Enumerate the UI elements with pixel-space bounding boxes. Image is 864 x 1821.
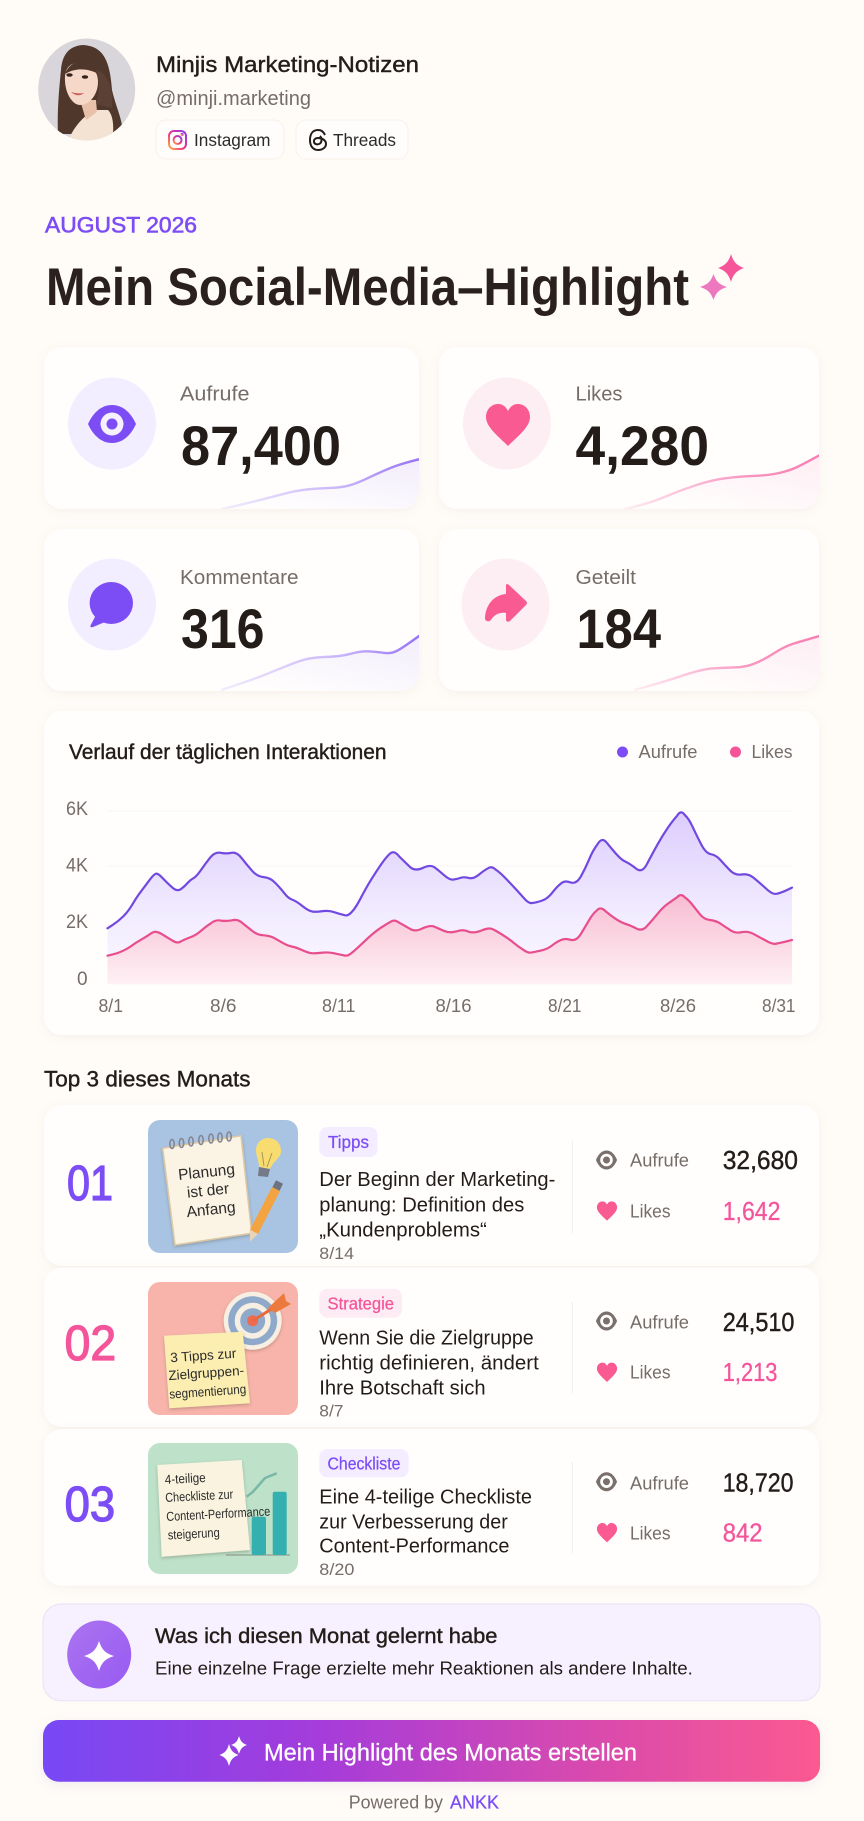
tag: Checkliste — [328, 1453, 400, 1473]
stats — [596, 1468, 794, 1548]
footer credit — [349, 1792, 499, 1812]
instagram pill — [156, 120, 284, 159]
post title — [319, 1486, 532, 1558]
panel: stat Geteilt: 184 — [576, 597, 661, 660]
instagram pill: Instagram — [194, 130, 270, 150]
button: create highlight — [43, 1720, 820, 1782]
panel: stat Likes — [448, 378, 819, 510]
stats: Aufrufe — [630, 1473, 689, 1493]
footer credit: Powered by — [349, 1792, 443, 1812]
panel: stat Kommentare: 316 — [181, 597, 264, 660]
icon: eye — [68, 378, 156, 470]
panel: stat Kommentare: Kommentare — [180, 567, 298, 589]
icon: threads — [310, 130, 326, 150]
panel: stat Aufrufe: Aufrufe — [180, 384, 250, 406]
thumbnail: checklist: Content-Performance — [166, 1504, 271, 1524]
section heading: Top 3 dieses Monats — [44, 1066, 251, 1092]
x axis labels: 8/1 — [98, 996, 123, 1016]
post title: zur Verbesserung der — [319, 1511, 508, 1533]
stats — [596, 1145, 798, 1226]
panel: top post 2 — [44, 1268, 819, 1427]
x axis labels: 8/26 — [660, 996, 696, 1016]
legend: Likes — [752, 742, 792, 762]
panel: stat Aufrufe — [52, 378, 419, 510]
panel: stat Aufrufe: 87,400 — [181, 414, 341, 477]
avatar portrait — [36, 36, 138, 144]
chart title: Verlauf der täglichen Interaktionen — [69, 741, 386, 764]
panel: monthly insight — [43, 1604, 820, 1701]
post title: „Kundenproblems“ — [319, 1220, 487, 1242]
threads pill: Threads — [333, 130, 396, 150]
post title: Ihre Botschaft sich — [319, 1377, 486, 1399]
stats: Likes — [630, 1523, 670, 1543]
profile header — [36, 36, 419, 159]
y axis labels: 6K — [66, 799, 88, 820]
handle: @minji.marketing — [156, 88, 311, 110]
post title — [319, 1327, 539, 1399]
stats: Likes — [630, 1202, 670, 1222]
account name: Minjis Marketing-Notizen — [156, 52, 419, 77]
rank 03: 03 — [65, 1478, 115, 1532]
stats: 842 — [723, 1518, 762, 1548]
stats: 24,510 — [723, 1307, 794, 1337]
icon: title sparkles — [700, 254, 744, 300]
tag — [319, 1127, 378, 1157]
area chart — [107, 812, 792, 984]
post title: Wenn Sie die Zielgruppe — [319, 1327, 534, 1349]
tag — [319, 1289, 402, 1318]
y axis labels — [66, 799, 792, 990]
x axis labels: 8/16 — [436, 996, 472, 1016]
panel: top post 3 — [44, 1429, 819, 1586]
panel: stat Likes: 4,280 — [576, 414, 709, 477]
insight heading: Was ich diesen Monat gelernt habe — [155, 1625, 498, 1648]
x axis labels: 8/31 — [762, 996, 796, 1016]
y axis labels: 2K — [66, 912, 88, 933]
x axis labels: 8/21 — [548, 996, 582, 1016]
title: Mein Social-Media–Highlight — [46, 258, 689, 317]
stats: Aufrufe — [630, 1150, 689, 1170]
stats: 1,213 — [723, 1357, 778, 1387]
insight text: Eine einzelne Frage erzielte mehr Reaktionen als andere Inhalte. — [155, 1658, 693, 1678]
thumbnail: checklist: 4-teilige — [164, 1470, 206, 1487]
stats: 32,680 — [723, 1145, 798, 1175]
thumbnail: notepad: ist der — [186, 1180, 230, 1202]
post title: Der Beginn der Marketing- — [319, 1169, 555, 1191]
footer credit: ANKK — [450, 1792, 499, 1812]
x axis labels: 8/11 — [322, 996, 356, 1016]
button: create highlight: Mein Highlight des Monats erstellen — [264, 1740, 637, 1767]
thumbnail: checklist: steigerung — [167, 1525, 220, 1542]
post title — [319, 1169, 555, 1242]
stats: 18,720 — [723, 1468, 794, 1498]
panel: stat Geteilt: Geteilt — [576, 567, 636, 589]
panel: daily interactions chart — [44, 711, 819, 1035]
stats: Aufrufe — [630, 1312, 689, 1332]
x axis labels — [98, 996, 796, 1016]
rank 01: 01 — [67, 1157, 113, 1211]
date: 8/7 — [319, 1402, 344, 1421]
date: 8/20 — [319, 1560, 354, 1579]
post title: richtig definieren, ändert — [319, 1352, 539, 1374]
tag: Strategie — [328, 1294, 394, 1314]
thumbnail: notepad — [148, 1120, 298, 1253]
panel: stat Kommentare — [52, 558, 419, 692]
date: 8/14 — [319, 1244, 354, 1263]
icon: sparkle badge — [67, 1620, 131, 1688]
threads pill — [296, 120, 408, 159]
y axis labels: 4K — [66, 856, 88, 876]
post title: planung: Definition des — [319, 1194, 524, 1216]
stats: Likes — [630, 1362, 670, 1382]
panel: stat Likes: Likes — [576, 384, 622, 406]
thumbnail: target: 3 Tipps zur — [170, 1346, 237, 1365]
thumbnail: target — [148, 1282, 298, 1415]
legend — [617, 742, 792, 762]
x axis labels: 8/6 — [210, 996, 236, 1016]
y axis labels: 0 — [77, 969, 88, 990]
icon: button sparkles — [220, 1736, 247, 1766]
thumbnail: notepad: Planung — [177, 1161, 236, 1184]
icon: share arrow — [462, 558, 550, 650]
post title: Content-Performance — [319, 1536, 509, 1558]
icon: heart — [463, 378, 551, 470]
thumbnail: notepad: Anfang — [186, 1199, 236, 1221]
legend: Aufrufe — [638, 742, 698, 762]
panel: stat Geteilt — [448, 558, 819, 692]
rank 02: 02 — [65, 1317, 116, 1371]
stats — [596, 1307, 794, 1387]
icon: speech bubble — [68, 558, 156, 650]
tag: Tipps — [328, 1132, 369, 1152]
stats: 1,642 — [723, 1196, 780, 1226]
month label: AUGUST 2026 — [45, 212, 197, 238]
thumbnail: target: segmentierung — [169, 1381, 247, 1402]
thumbnail: checklist — [148, 1443, 298, 1574]
panel: top post 1 — [52, 1120, 810, 1268]
tag — [319, 1449, 409, 1477]
icon: instagram — [169, 131, 186, 149]
thumbnail: checklist: Checkliste zur — [165, 1486, 234, 1505]
post title: Eine 4-teilige Checkliste — [319, 1486, 532, 1508]
thumbnail: target: Zielgruppen- — [168, 1363, 245, 1383]
